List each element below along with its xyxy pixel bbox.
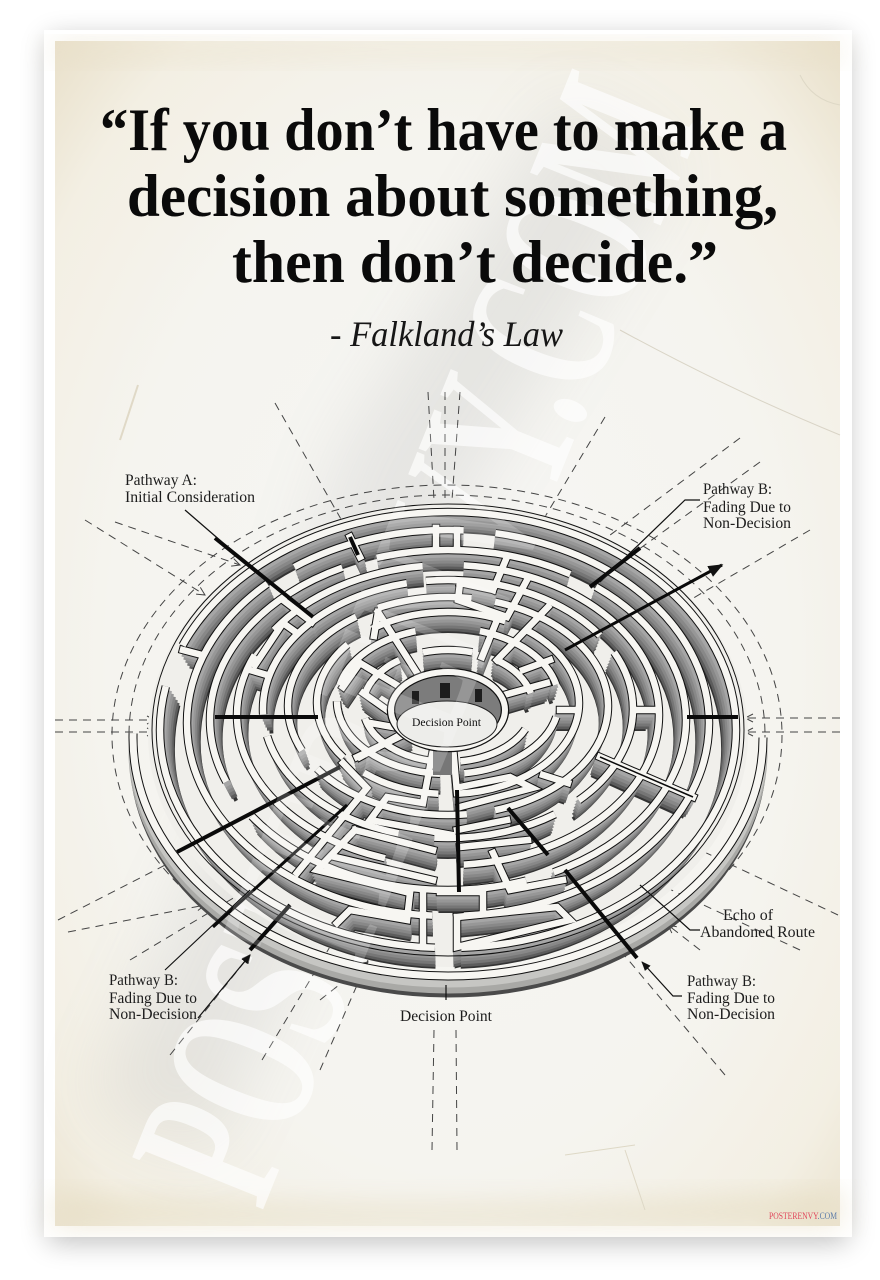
label: pathway B lower right: Non-Decision: [687, 1006, 775, 1023]
title quote: [100, 97, 787, 295]
attribution: - Falkland’s Law: [330, 314, 563, 354]
title quote: then don’t decide.”: [232, 229, 718, 295]
label: pathway A: Initial Consideration: [125, 489, 255, 506]
central court: [391, 672, 505, 775]
title quote: “If you don’t have to make a: [100, 97, 787, 163]
dashed construction lines: [55, 392, 840, 1150]
label: pathway B lower left: Non-Decision: [109, 1006, 197, 1023]
label: decision point: Decision Point: [400, 1008, 493, 1025]
central label: Decision Point: [412, 715, 482, 729]
label: echo of abandoned route: Echo of: [723, 907, 774, 924]
title quote: decision about something,: [127, 163, 778, 229]
circular labyrinth: [133, 500, 763, 994]
logo: POSTERENVY.COM: [769, 1212, 837, 1222]
label: pathway B lower left: Fading Due to: [109, 990, 197, 1007]
label: pathway B upper right: Fading Due to: [703, 499, 791, 516]
label: echo of abandoned route: Abandoned Route: [700, 924, 815, 941]
label: pathway B lower right: Fading Due to: [687, 990, 775, 1007]
label: pathway B upper right: Pathway B:: [703, 481, 772, 498]
leader lines: [165, 500, 700, 1018]
pathway bars: [177, 537, 738, 958]
label: pathway A: Pathway A:: [125, 472, 197, 489]
label: pathway B upper right: Non-Decision: [703, 515, 791, 532]
label: pathway B lower right: Pathway B:: [687, 973, 756, 990]
watermark shadow band: [150, 130, 620, 1130]
label: pathway B lower left: Pathway B:: [109, 972, 178, 989]
